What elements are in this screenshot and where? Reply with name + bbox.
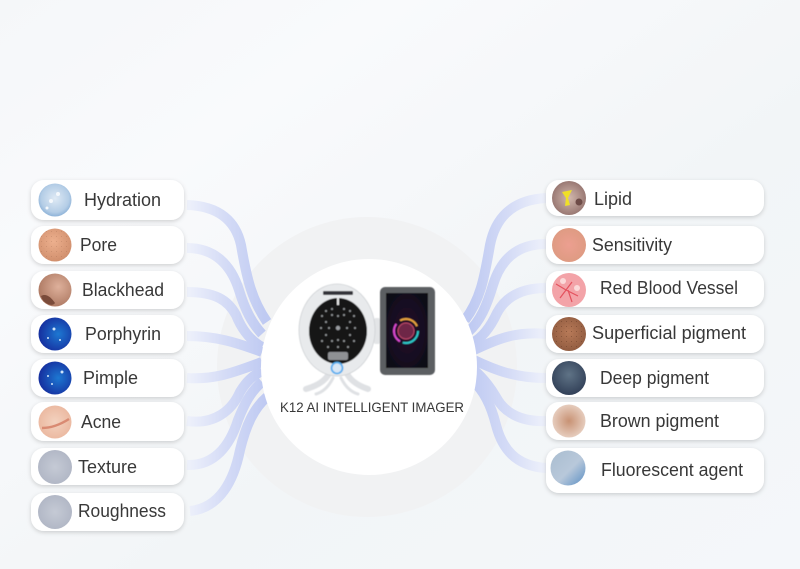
pill: Roughness	[31, 493, 184, 531]
icon: brown pigment	[552, 404, 586, 438]
pill: Sensitivity	[546, 226, 764, 264]
pill: Porphyrin	[31, 315, 184, 353]
icon: hydration	[38, 184, 72, 216]
icon: pore	[38, 228, 72, 262]
device top slot	[323, 291, 353, 295]
pill: Lipid: Lipid	[594, 189, 632, 209]
pill: Acne: Acne	[81, 412, 121, 432]
pill: Pore	[31, 226, 184, 264]
icon: porphyrin	[38, 318, 72, 350]
left connector ribbons	[187, 205, 267, 511]
icon: fluorescent agent	[550, 450, 586, 486]
icon: acne	[38, 406, 72, 438]
device chin rest	[328, 352, 348, 360]
product caption: K12 AI INTELLIGENT IMAGER	[280, 399, 464, 415]
icon: lipid	[552, 181, 586, 215]
device inner light dots	[320, 308, 356, 348]
central white circle	[261, 259, 477, 475]
product: skin imager device	[299, 284, 380, 394]
pill: Deep pigment: Deep pigment	[600, 368, 709, 388]
pill: Pimple: Pimple	[83, 368, 138, 388]
pill: Superficial pigment	[546, 315, 764, 353]
device light button	[332, 362, 342, 374]
tablet colour ring	[394, 319, 418, 343]
icon: superficial pigment	[552, 317, 586, 351]
pill: Pore: Pore	[80, 235, 117, 255]
pill: Hydration	[31, 180, 184, 220]
pill: Lipid	[546, 180, 764, 216]
product: tablet	[380, 287, 435, 375]
pill: Fluorescent agent	[546, 448, 764, 493]
icon: red blood vessel	[552, 273, 586, 307]
pill: Brown pigment	[546, 402, 764, 440]
pill: Deep pigment	[546, 359, 764, 397]
pill: Hydration: Hydration	[84, 190, 161, 210]
pill: Blackhead	[31, 271, 184, 309]
pill: Red Blood Vessel: Red Blood Vessel	[600, 278, 738, 298]
pill: Sensitivity: Sensitivity	[592, 235, 672, 255]
device shell	[299, 284, 375, 376]
pill: Superficial pigment: Superficial pigment	[592, 323, 746, 343]
pill: Brown pigment: Brown pigment	[600, 411, 719, 431]
device side handle	[374, 318, 380, 344]
pill: Roughness: Roughness	[78, 501, 166, 521]
icon: deep pigment	[552, 361, 586, 395]
pill: Texture: Texture	[78, 457, 137, 477]
pill: Blackhead: Blackhead	[82, 280, 164, 300]
pill: Pimple	[31, 359, 184, 397]
device stand	[306, 368, 368, 394]
tablet screen	[386, 293, 428, 368]
device interior	[309, 298, 367, 364]
right connector ribbons	[465, 198, 546, 468]
icon: texture	[38, 450, 72, 484]
central halo circle	[217, 217, 517, 517]
device top light	[337, 298, 339, 305]
icon: pimple	[38, 362, 72, 394]
pill: Acne	[31, 402, 184, 441]
pill: Texture	[31, 448, 184, 485]
pill: Red Blood Vessel	[546, 271, 764, 307]
pill: Fluorescent agent: Fluorescent agent	[601, 460, 743, 480]
pill: Porphyrin: Porphyrin	[85, 324, 161, 344]
icon: roughness	[38, 495, 72, 529]
icon: sensitivity	[552, 228, 586, 262]
icon: blackhead	[38, 274, 72, 306]
